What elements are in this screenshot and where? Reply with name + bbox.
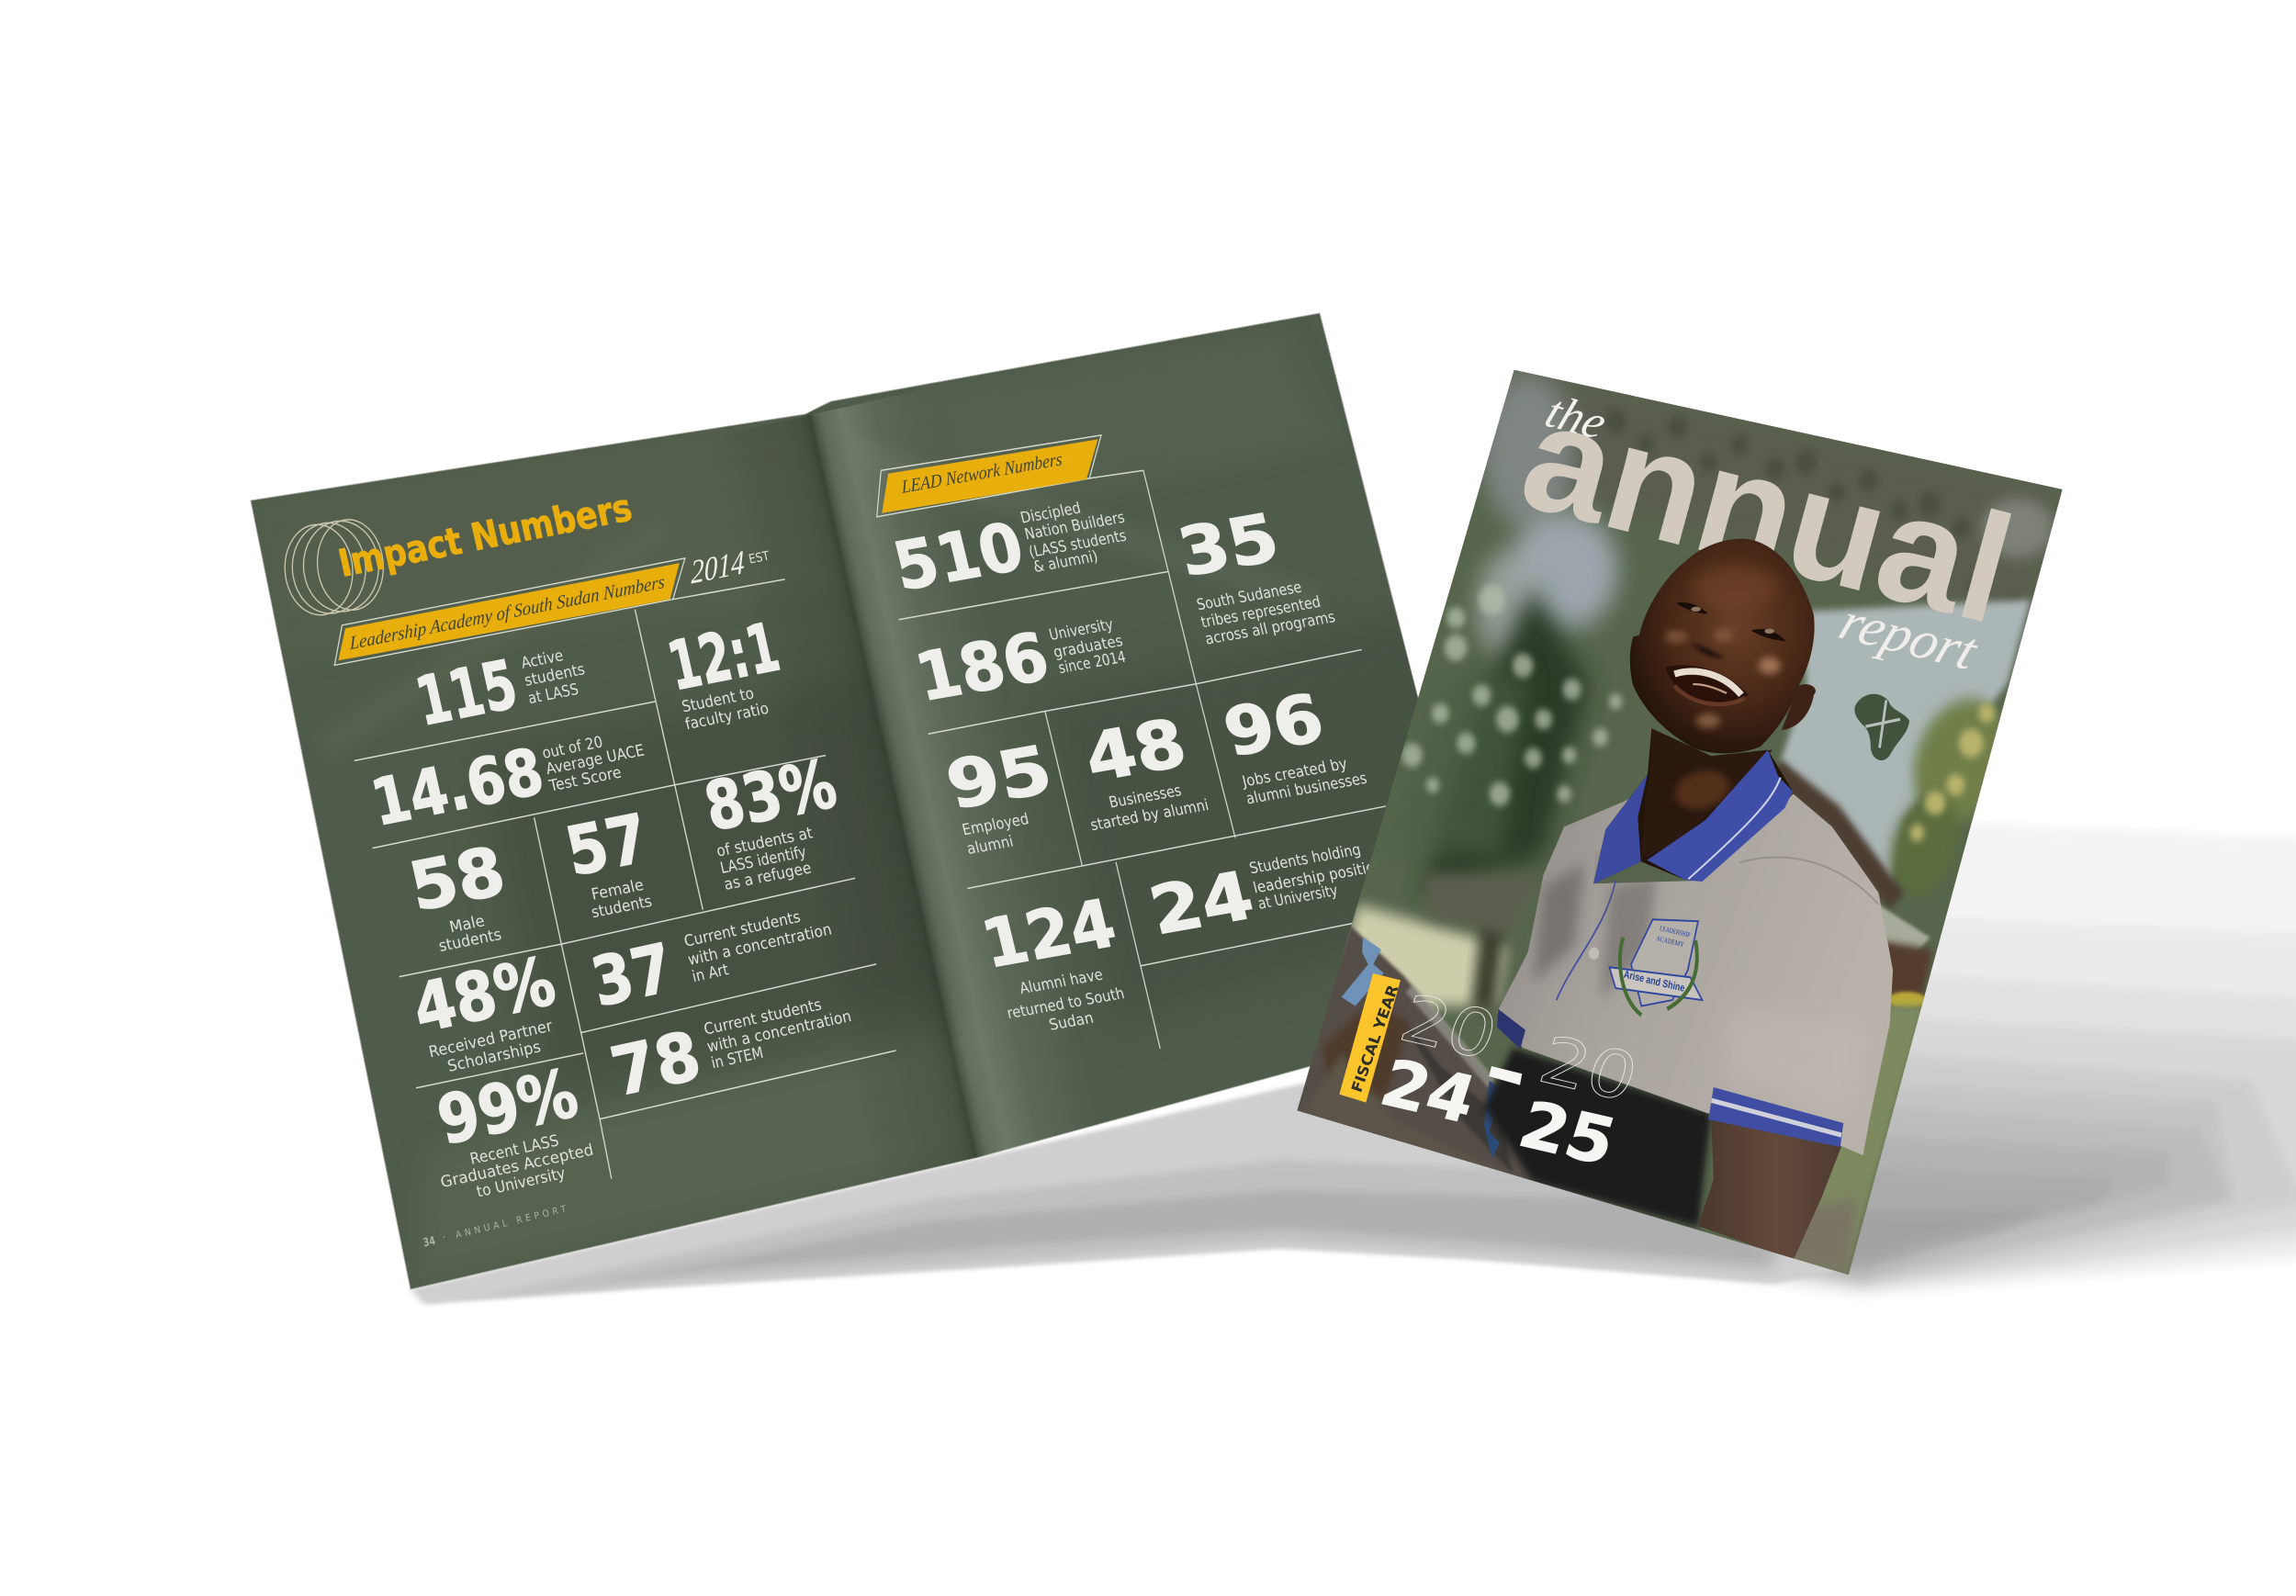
stat: 96 jobs created: alumni businesses xyxy=(1244,770,1368,808)
label: Fiscal Year: FISCAL YEAR xyxy=(1348,983,1401,1095)
page footer: · xyxy=(441,1231,447,1244)
stat: 12:1 student to faculty ratio: faculty ratio xyxy=(683,699,771,734)
stat: 48 businesses started: Businesses xyxy=(1107,781,1183,812)
stat: 58 male students xyxy=(403,833,512,955)
emblem on shirt: LEADERSHIP xyxy=(1660,925,1691,939)
stat: 37 concentration in Art: with a concentration xyxy=(686,920,833,969)
neck xyxy=(1593,728,1793,884)
stat: 48 businesses started xyxy=(1077,704,1210,835)
stat: 99% accepted to university: to University xyxy=(475,1163,568,1201)
stat: 115 active students: 115 xyxy=(410,646,524,741)
stat: 37 concentration in Art: 37 xyxy=(585,930,680,1022)
stat: 96 jobs created: Jobs created by xyxy=(1240,755,1349,791)
stat: 24 leadership positions: at University xyxy=(1256,882,1340,913)
stat: 186 university graduates: since 2014 xyxy=(1056,648,1128,678)
icon: Africa logo xyxy=(1854,694,1909,760)
stat: 78 concentration in STEM: with a concentration xyxy=(705,1006,853,1056)
stat: 12:1 student to faculty ratio: Student to xyxy=(680,684,756,716)
banner: LEAD Network Numbers xyxy=(877,435,1101,517)
stat: 95 employed alumni xyxy=(940,731,1059,858)
stat: 115 active students: at LASS xyxy=(526,680,580,707)
stat: 57 female students: Female xyxy=(590,875,646,904)
title: report: report xyxy=(1831,591,1986,682)
stat: 14.68 average UACE test score: out of 20 xyxy=(540,733,604,762)
stat: 35 South Sudanese tribes: South Sudanese xyxy=(1195,578,1303,614)
stat: 37 concentration in Art xyxy=(585,907,833,1022)
stat: 78 concentration in STEM: 78 xyxy=(604,1017,707,1112)
stat: 57 female students: students xyxy=(590,892,654,921)
stat: 186 university graduates: 186 xyxy=(908,618,1056,716)
stat: 58 male students: students xyxy=(437,925,503,955)
collar xyxy=(1593,750,1793,884)
stat: 57 female students: 57 xyxy=(559,801,656,892)
stat: 12:1 student to faculty ratio: 12:1 xyxy=(661,609,786,706)
stat: 37 concentration in Art: in Art xyxy=(691,960,730,986)
stat: 24 leadership positions xyxy=(1142,840,1385,950)
stat: 12:1 student to faculty ratio xyxy=(661,609,786,734)
stat: 124 alumni returned: Alumni have xyxy=(1018,965,1105,998)
banner: Leadership Academy of South Sudan Numbers: Leadership Academy of South Sudan Numbers xyxy=(349,571,665,655)
stat: 83% identify as refugee: LASS identify xyxy=(718,842,808,877)
stat: 83% identify as refugee: as a refugee xyxy=(722,859,813,894)
stat: 14.68 average UACE test score xyxy=(365,733,646,840)
stat: 83% identify as refugee: of students at xyxy=(715,824,815,860)
head xyxy=(1630,539,1816,753)
stat: 124 alumni returned xyxy=(974,885,1126,1034)
stat: 510 nation builders xyxy=(886,499,1128,606)
stat: 58 male students: 58 xyxy=(403,833,512,927)
stat: 14.68 average UACE test score: Test Score xyxy=(546,763,623,795)
stat: 24 leadership positions: leadership position xyxy=(1252,857,1385,897)
stat: 124 alumni returned: returned to South xyxy=(1005,984,1126,1023)
stat: 115 active students: Active xyxy=(519,646,565,672)
cover of the annual report xyxy=(1296,367,2063,1275)
stat: 99% accepted to university: Recent LASS xyxy=(468,1131,560,1168)
page paper: open magazine base xyxy=(251,313,1499,1289)
emblem on shirt: Arise and Shine xyxy=(1623,969,1685,995)
stat: 48% partner scholarships: Scholarships xyxy=(445,1038,543,1075)
skirt xyxy=(1484,1048,1711,1227)
stat: 115 active students: students xyxy=(523,659,587,690)
emblem on shirt: ACADEMY xyxy=(1656,935,1685,949)
years: 20 outline: 20 xyxy=(1392,980,1506,1074)
fiscal year lockup xyxy=(1339,973,1647,1180)
stat: 124 alumni returned: Sudan xyxy=(1047,1009,1096,1034)
stat: 35 South Sudanese tribes: 35 xyxy=(1171,500,1286,591)
left page: Leadership Academy numbers xyxy=(280,487,896,1250)
emblem on shirt xyxy=(1609,919,1702,1015)
stat: 95 employed alumni: alumni xyxy=(965,832,1015,858)
stat: 35 South Sudanese tribes: tribes represented xyxy=(1199,593,1322,632)
stat: 14.68 average UACE test score: Average UACE xyxy=(544,741,646,778)
stat: 186 university graduates: University xyxy=(1047,615,1115,644)
banner: LEAD Network Numbers: LEAD Network Numbers xyxy=(900,449,1063,499)
stat: 510 nation builders: & alumni) xyxy=(1031,547,1099,576)
stat: 510 nation builders: Discipled xyxy=(1019,499,1083,527)
stat: 35 South Sudanese tribes xyxy=(1171,500,1337,648)
stat: 14.68 average UACE test score: 14.68 xyxy=(365,735,550,840)
stat: 99% accepted to university: Graduates Accepted xyxy=(439,1141,595,1191)
stat: 186 university graduates: graduates xyxy=(1052,632,1125,661)
stat: 83% identify as refugee: 83% xyxy=(698,746,843,847)
title: the: the xyxy=(1538,386,1614,449)
right page: LEAD Network numbers xyxy=(877,435,1386,1049)
stat: 83% identify as refugee xyxy=(698,746,843,894)
page footer: ANNUAL REPORT xyxy=(455,1204,568,1241)
stat: 99% accepted to university xyxy=(431,1055,595,1201)
years: second 20 outline: 20 xyxy=(1531,1021,1647,1116)
portrait: neck, collar and head xyxy=(1593,539,1816,884)
stat: 510 nation builders: Nation Builders xyxy=(1023,508,1126,544)
stat: 510 nation builders: 510 xyxy=(886,508,1030,606)
established year label: EST xyxy=(748,549,771,568)
stat: 48% partner scholarships: Received Partner xyxy=(427,1017,555,1062)
stat: 95 employed alumni: Employed xyxy=(961,810,1030,839)
dash xyxy=(1489,1066,1522,1085)
brochure spread xyxy=(251,313,1499,1289)
stat: 24 leadership positions: Students holding xyxy=(1247,840,1363,878)
stat: 96 jobs created xyxy=(1217,680,1368,808)
stat: 96 jobs created: 96 xyxy=(1217,680,1331,771)
open book and hand xyxy=(1296,926,1533,1182)
stat: 58 male students: Male xyxy=(447,912,486,937)
stat: 48 businesses started: 48 xyxy=(1077,704,1193,797)
stat: 78 concentration in STEM: Current students xyxy=(702,995,823,1039)
placket under collar xyxy=(1593,848,1702,884)
stat: 48 businesses started: started by alumni xyxy=(1088,796,1210,835)
faint background photograph on pages xyxy=(251,331,1488,1289)
shadow: brochure cast on the ground xyxy=(411,1084,1843,1305)
page footer: 34 xyxy=(422,1233,436,1250)
stat: 186 university graduates xyxy=(908,615,1128,716)
cover photo background xyxy=(1296,367,2063,1275)
years: 25 solid: 25 xyxy=(1511,1086,1625,1180)
shadow: cover cast on the ground xyxy=(1429,807,2296,1298)
stat: 48% partner scholarships: 48% xyxy=(407,943,562,1049)
stat: 99% accepted to university: 99% xyxy=(431,1055,585,1161)
arm xyxy=(1698,1114,1841,1260)
years: 24 solid: 24 xyxy=(1372,1045,1485,1138)
title: annual: annual xyxy=(1506,367,2030,657)
stat: 95 employed alumni: 95 xyxy=(940,731,1059,825)
stat: 24 leadership positions: 24 xyxy=(1142,857,1261,950)
stat: 510 nation builders: (LASS students xyxy=(1027,526,1128,561)
icon: overlapping rings logo xyxy=(280,515,388,620)
stat: 35 South Sudanese tribes: across all programs xyxy=(1203,608,1337,648)
stat: 78 concentration in STEM xyxy=(604,995,853,1112)
stat: 124 alumni returned: 124 xyxy=(974,885,1123,983)
stat: 37 concentration in Art: Current students xyxy=(682,907,802,950)
heading: Impact Numbers: Impact Numbers xyxy=(334,487,636,586)
stat: 78 concentration in STEM: in STEM xyxy=(710,1043,765,1073)
shirt xyxy=(1497,794,1893,1155)
page footer xyxy=(422,1204,568,1250)
established year label: 2014 xyxy=(691,544,745,591)
label: Fiscal Year xyxy=(1339,973,1401,1103)
